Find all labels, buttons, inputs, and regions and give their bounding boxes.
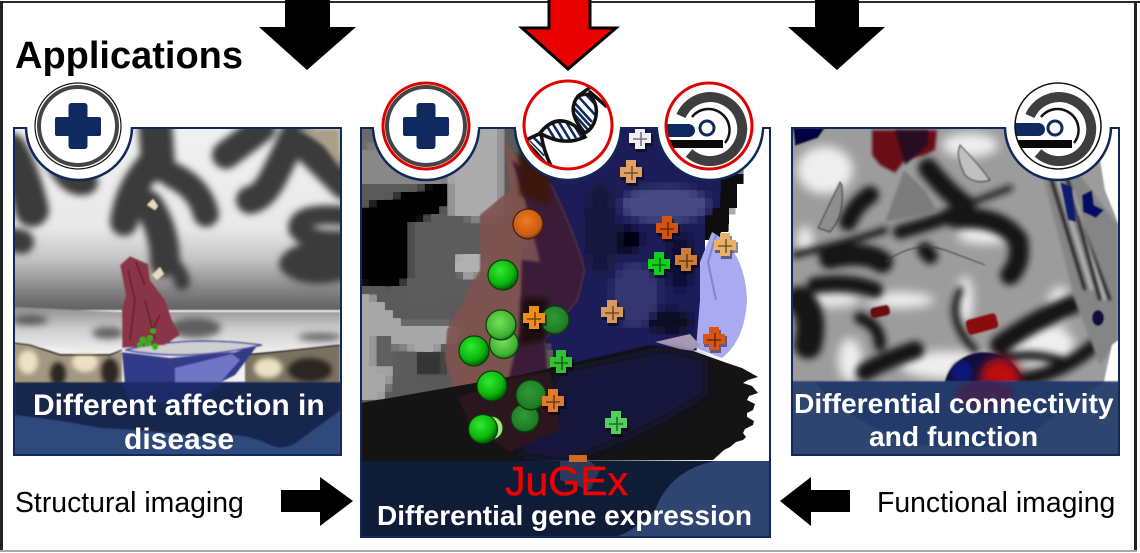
arrow: top centre red xyxy=(522,0,616,69)
caption: different affection: Different affection in xyxy=(33,389,325,422)
pink structure xyxy=(444,141,586,386)
caption: differential connectivity xyxy=(794,387,1114,452)
green spheres xyxy=(137,328,158,350)
arrow: functional to JuGEx xyxy=(780,477,850,526)
label: functional imaging: Functional imaging xyxy=(877,487,1115,519)
icon: clinical cross left xyxy=(35,83,121,169)
black stair edge xyxy=(702,165,740,240)
lower slice xyxy=(14,307,340,352)
pixelated imaging slice xyxy=(361,128,740,418)
beige cortex, top right xyxy=(296,128,341,170)
right lobe xyxy=(1044,176,1118,364)
icon: DNA helix xyxy=(524,81,612,169)
icon: clinical cross middle xyxy=(383,83,469,169)
large activation blob xyxy=(944,350,1028,382)
lavender structure xyxy=(696,232,747,358)
caption backdrop xyxy=(618,461,769,536)
brain white matter background xyxy=(15,213,340,311)
panel: functional imaging xyxy=(791,127,1120,456)
arrow: top right xyxy=(788,0,885,70)
floor with jagged edge xyxy=(361,345,758,462)
icon: MRI scanner right xyxy=(1009,83,1101,169)
caption: different affection: disease xyxy=(124,423,234,456)
caption: differential connectivity: Differential connectivity xyxy=(794,387,1114,419)
arrow: top left xyxy=(259,0,356,70)
notch: right panel xyxy=(1005,127,1111,180)
caption backdrop xyxy=(15,410,340,454)
title: Applications xyxy=(15,35,243,77)
red structure xyxy=(120,256,180,348)
specks xyxy=(147,199,164,280)
small JuGEx cross under caption xyxy=(569,455,587,462)
green spheres xyxy=(459,260,569,444)
outlined ventricles xyxy=(818,145,990,265)
caption: JuGEx: JuGEx xyxy=(505,458,629,504)
cortical folds xyxy=(10,120,345,282)
notch: left panel xyxy=(26,127,132,180)
blank strip above middle panel xyxy=(374,122,762,130)
grey MRI background xyxy=(792,128,1119,382)
arrow: structural to JuGEx xyxy=(281,477,353,526)
activations red and blue xyxy=(793,128,1104,336)
white corner xyxy=(1100,129,1118,224)
label: structural imaging: Structural imaging xyxy=(15,487,244,519)
caption: different affection xyxy=(33,389,325,456)
caption: differential gene expression: Differential gene expression xyxy=(377,500,752,531)
central grey wedge xyxy=(885,170,938,222)
notches: middle panel xyxy=(373,127,763,180)
orange sphere xyxy=(513,209,543,239)
panel: JuGEx gene expression xyxy=(360,126,771,538)
icon: MRI scanner middle xyxy=(660,83,752,169)
navy volume xyxy=(545,129,721,363)
panel: structural imaging xyxy=(10,120,345,456)
blue structure xyxy=(122,345,258,385)
beige lobes xyxy=(14,343,340,386)
dark sulci xyxy=(795,168,1095,380)
cross markers xyxy=(523,126,738,437)
caption backdrop xyxy=(792,381,1119,456)
caption: differential connectivity: and function xyxy=(869,420,1038,452)
